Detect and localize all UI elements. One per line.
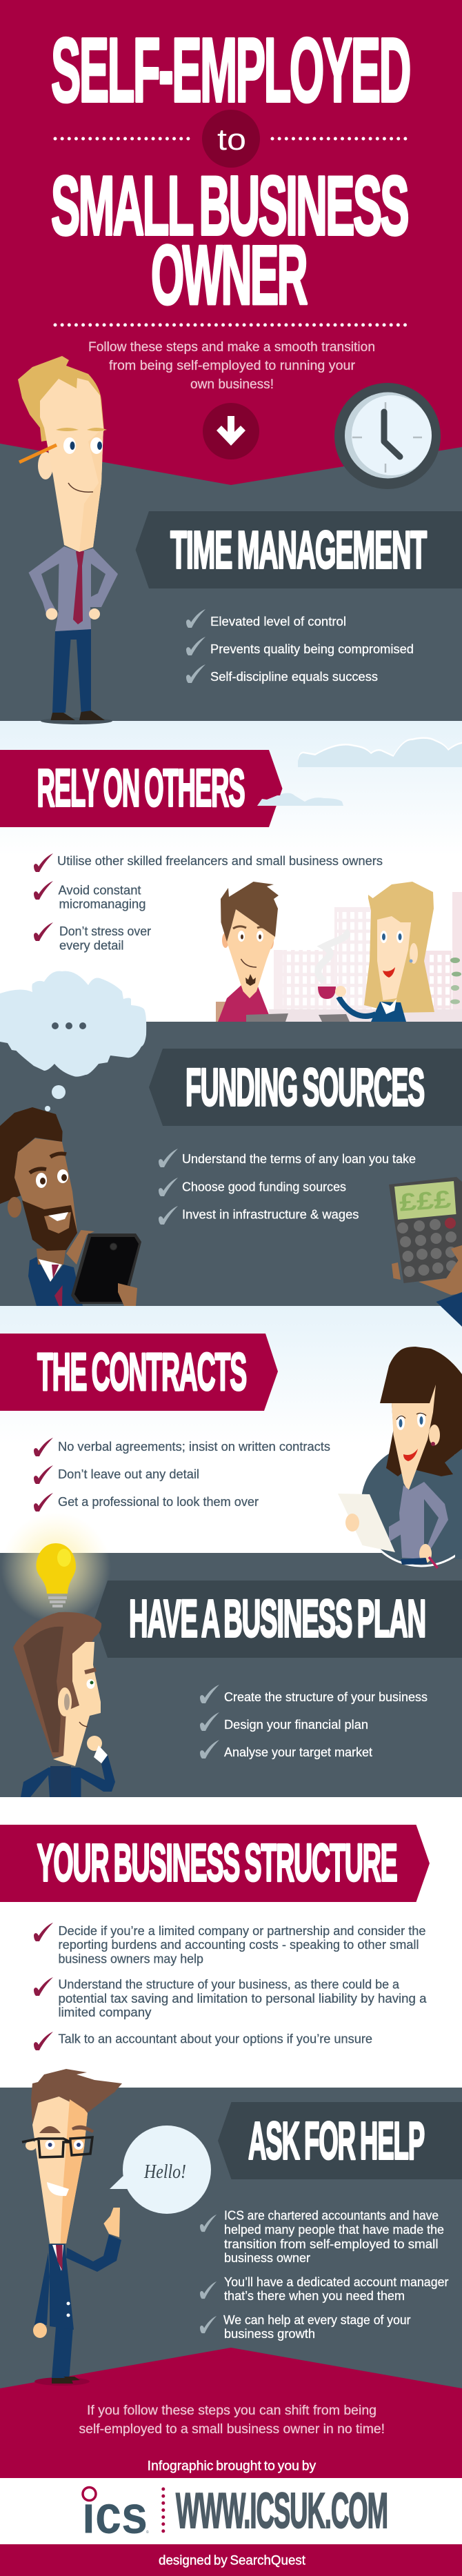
to badge: to (217, 123, 246, 157)
icon: light bulb (1, 1512, 111, 1623)
checklist: that’s there when you need them (224, 2289, 405, 2303)
banner: funding sources (149, 1049, 462, 1126)
banner: rely on others (0, 750, 283, 827)
checklist: Avoid constant (58, 883, 141, 897)
dotted divider lower (55, 323, 407, 327)
checklist: Invest in infrastructure & wages (182, 1207, 359, 1221)
checklist (34, 853, 383, 952)
figure: woman with coffee (318, 882, 434, 1022)
figure: bearded man with tablet (0, 1107, 141, 1306)
checklist: Elevated level of control (210, 615, 346, 628)
checklist: business owners may help (58, 1952, 203, 1966)
intro text: Follow these steps and make a smooth transition (88, 340, 375, 355)
checklist: ICS are chartered accountants and have (224, 2209, 439, 2223)
checklist: Don’t stress over (59, 924, 151, 938)
panel: footer (79, 2404, 388, 2568)
panel: time management (18, 356, 462, 724)
dotted divider left (55, 137, 190, 141)
checklist: We can help at every stage of your (223, 2313, 411, 2327)
figure: thinking man (13, 1612, 115, 1797)
thought cloud (0, 971, 146, 1111)
dotted divider right (272, 137, 407, 141)
checklist: micromanaging (59, 897, 146, 911)
checklist (34, 1923, 428, 2050)
checklist: Choose good funding sources (182, 1180, 346, 1193)
currency display: £££ (399, 1185, 452, 1217)
banner: your business structure (0, 1825, 430, 1902)
checklist: every detail (59, 938, 124, 952)
checklist: Self-discipline equals success (210, 670, 378, 684)
to badge (202, 110, 260, 168)
banner: the contracts: THE CONTRACTS (37, 1343, 246, 1402)
checklist: Utilise other skilled freelancers and small business owners (57, 854, 383, 868)
figure: hand with calculator (389, 1177, 462, 1327)
speech bubble: Hello! (143, 2161, 186, 2183)
banner: the contracts (0, 1334, 278, 1411)
speech bubble (110, 2126, 211, 2214)
panel: the contracts (0, 1334, 462, 1568)
banner: ask for help (218, 2102, 462, 2179)
checklist: Prevents quality being compromised (210, 642, 414, 656)
checklist: Don’t leave out any detail (58, 1467, 199, 1481)
banner: have a business plan (94, 1581, 462, 1658)
banner: rely on others: RELY ON OTHERS (37, 759, 245, 818)
checklist: reporting burdens and accounting costs - speaking to other small (58, 1938, 419, 1952)
panel: ask for help (22, 2069, 462, 2386)
panel: funding sources (0, 971, 462, 1327)
calculator keys (397, 1218, 457, 1277)
intro text: from being self-employed to running your (109, 359, 356, 373)
checklist: potential tax saving and limitation to personal liability by having a (58, 1992, 428, 2005)
checklist: limited company (58, 2005, 152, 2019)
checklist: Get a professional to look them over (58, 1495, 259, 1509)
checklist (159, 1149, 416, 1225)
credit line: Infographic brought to you by (148, 2459, 317, 2474)
checklist: Analyse your target market (224, 1745, 372, 1759)
checklist: Understand the structure of your business, as there could be a (58, 1977, 400, 1991)
checklist: You’ll have a dedicated account manager (224, 2275, 448, 2289)
illustration: city buildings (269, 892, 462, 1022)
checklist: helped many people that have made the (224, 2223, 444, 2237)
checklist: Decide if you’re a limited company or partnership and consider the (58, 1924, 426, 1938)
checklist: Design your financial plan (224, 1718, 368, 1732)
title line: owner: OWNER (151, 228, 307, 321)
panel: header (51, 19, 441, 489)
dotted separator (161, 2489, 165, 2532)
banner: time management (135, 511, 462, 588)
checklist (200, 1685, 428, 1759)
checklist: business growth (224, 2327, 315, 2341)
checklist: transition from self-employed to small (224, 2237, 439, 2251)
panel: rely on others (0, 737, 462, 1022)
figure: man with pencil (18, 356, 118, 724)
checklist: Talk to an accountant about your options if you’re unsure (58, 2032, 372, 2046)
icon: down arrow (203, 403, 259, 459)
intro text (88, 340, 375, 392)
logo: ics: © (146, 2530, 149, 2535)
designer credit: designed by SearchQuest (159, 2554, 306, 2568)
checklist (200, 2209, 448, 2341)
logo: ics: ics (82, 2484, 148, 2544)
closing text: If you follow these steps you can shift from being (87, 2404, 376, 2418)
closing text (79, 2404, 385, 2437)
checklist (34, 1438, 330, 1512)
icon: clock (334, 383, 441, 489)
checklist: Understand the terms of any loan you take (182, 1152, 416, 1166)
checklist (186, 609, 414, 684)
clouds (257, 737, 462, 806)
closing text: self-employed to a small business owner in no time! (79, 2422, 385, 2437)
checklist: No verbal agreements; insist on written contracts (58, 1440, 330, 1454)
checklist: business owner (224, 2251, 310, 2265)
intro text: own business! (190, 377, 274, 392)
panel: your business structure (0, 1825, 430, 2050)
panel: business plan (1, 1512, 462, 1797)
checklist: Create the structure of your business (224, 1690, 428, 1704)
figure: man with laptop (216, 882, 288, 1022)
figure: man with glasses, thumbs up (22, 2069, 122, 2386)
figure: woman with document (338, 1347, 462, 1568)
